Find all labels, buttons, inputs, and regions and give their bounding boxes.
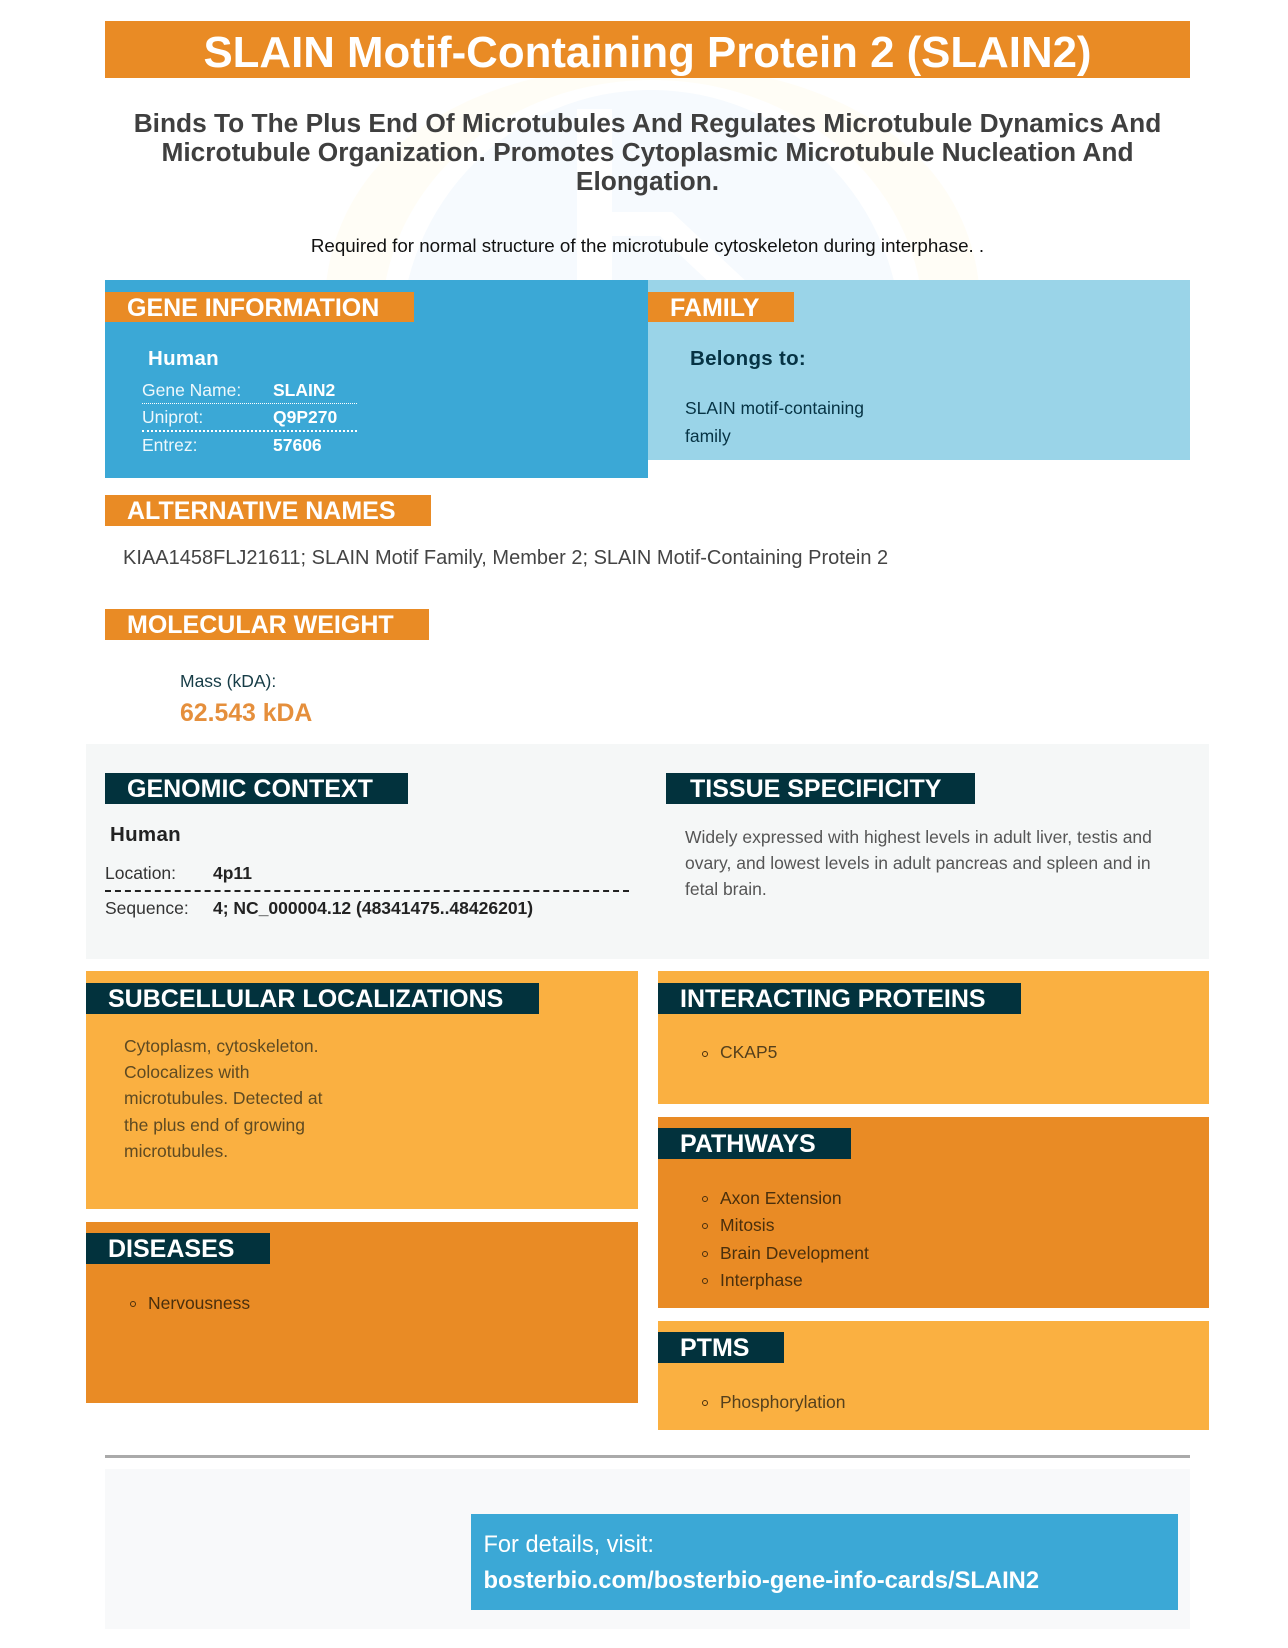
panel: footer	[105, 1469, 1190, 1629]
callout label: For details, visit:	[484, 1532, 654, 1558]
panel: interacting proteins	[658, 971, 1209, 1104]
heading: pathways: PATHWAYS	[680, 1130, 816, 1158]
heading: diseases: DISEASES	[108, 1235, 234, 1263]
ptm item: Phosphorylation	[720, 1392, 846, 1412]
heading: molecular weight: MOLECULAR WEIGHT	[127, 611, 394, 639]
tissue text: fetal brain.	[685, 879, 767, 899]
heading: gene information: GENE INFORMATION	[127, 294, 379, 322]
bullet	[130, 1301, 136, 1307]
heading: ptms	[658, 1332, 784, 1363]
alternative names text: KIAA1458FLJ21611; SLAIN Motif Family, Member 2; SLAIN Motif-Containing Protein 2	[123, 547, 888, 569]
entrez label: Entrez:	[142, 435, 197, 455]
heading: pathways	[658, 1128, 851, 1159]
protein item: CKAP5	[720, 1042, 777, 1062]
panel: family	[648, 280, 1190, 460]
subtitle: Microtubule Organization. Promotes Cytoplasmic Microtubule Nucleation And	[161, 137, 1134, 167]
tissue text: Widely expressed with highest levels in adult liver, testis and	[685, 827, 1152, 847]
bullet	[702, 1278, 708, 1284]
bullet	[702, 1196, 708, 1202]
tissue text: ovary, and lowest levels in adult pancreas and spleen and in	[685, 853, 1151, 873]
heading: alternative names: ALTERNATIVE NAMES	[127, 497, 396, 525]
tissue text	[685, 827, 1152, 899]
watermark logo	[327, 78, 978, 280]
title text: SLAIN Motif-Containing Protein 2 (SLAIN2)	[203, 28, 1092, 77]
bullet	[702, 1400, 708, 1406]
location value: 4p11	[213, 863, 252, 883]
localization text: Cytoplasm, cytoskeleton.	[124, 1036, 319, 1056]
heading: family: FAMILY	[670, 294, 759, 322]
location row	[105, 858, 629, 892]
species label: Human	[110, 823, 181, 846]
heading: ptms: PTMS	[680, 1334, 749, 1362]
title banner	[105, 21, 1190, 78]
callout: details link	[471, 1514, 1178, 1610]
panel: diseases	[86, 1222, 638, 1403]
localization text: microtubules. Detected at	[124, 1088, 322, 1108]
heading: family	[648, 292, 794, 322]
sequence label: Sequence:	[105, 898, 189, 918]
heading: subcellular localizations: SUBCELLULAR LOCALIZATIONS	[108, 985, 503, 1013]
panel: ptms	[658, 1321, 1209, 1430]
mass label: Mass (kDA):	[180, 671, 276, 691]
mass value: 62.543 kDA	[180, 700, 312, 727]
description: Required for normal structure of the microtubule cytoskeleton during interphase. .	[311, 235, 984, 256]
species label: Human	[148, 347, 219, 370]
gene name row	[142, 375, 357, 404]
belongs to label: Belongs to:	[690, 347, 806, 370]
pathway item: Interphase	[720, 1270, 803, 1290]
heading: diseases	[86, 1233, 270, 1264]
pathway item: Axon Extension	[720, 1188, 842, 1208]
sequence value: 4; NC_000004.12 (48341475..48426201)	[213, 898, 533, 918]
uniprot label: Uniprot:	[142, 407, 203, 427]
location label: Location:	[105, 863, 176, 883]
panel: gene information	[105, 280, 648, 478]
localization text: the plus end of growing	[124, 1115, 305, 1135]
panel: subcellular localizations	[86, 971, 638, 1209]
subtitle: Elongation.	[576, 166, 719, 196]
sequence row	[105, 898, 533, 918]
callout url: bosterbio.com/bosterbio-gene-info-cards/SLAIN2	[484, 1567, 1039, 1594]
uniprot row	[142, 402, 357, 432]
entrez value: 57606	[273, 435, 322, 455]
panel: pathways	[658, 1117, 1209, 1308]
family text	[685, 398, 864, 446]
pathway item: Mitosis	[720, 1215, 774, 1235]
gene name label: Gene Name:	[142, 380, 241, 400]
localization text: microtubules.	[124, 1141, 228, 1161]
family text: family	[685, 426, 731, 446]
subtitle	[134, 108, 1161, 196]
subtitle: Binds To The Plus End Of Microtubules And Regulates Microtubule Dynamics And	[134, 108, 1161, 138]
gene name value: SLAIN2	[273, 380, 335, 400]
localization text	[124, 1036, 322, 1161]
uniprot value: Q9P270	[273, 407, 337, 427]
pathway item: Brain Development	[720, 1243, 869, 1263]
bullet	[702, 1051, 708, 1057]
bullet	[702, 1223, 708, 1229]
panel: genomic and tissue	[86, 744, 1209, 959]
heading: tissue specificity: TISSUE SPECIFICITY	[690, 775, 941, 803]
heading: genomic context: GENOMIC CONTEXT	[127, 775, 373, 803]
entrez row	[142, 435, 322, 455]
heading: interacting proteins: INTERACTING PROTEINS	[680, 985, 986, 1013]
family text: SLAIN motif-containing	[685, 398, 864, 418]
localization text: Colocalizes with	[124, 1062, 249, 1082]
disease item: Nervousness	[148, 1293, 250, 1313]
bullet	[702, 1251, 708, 1257]
